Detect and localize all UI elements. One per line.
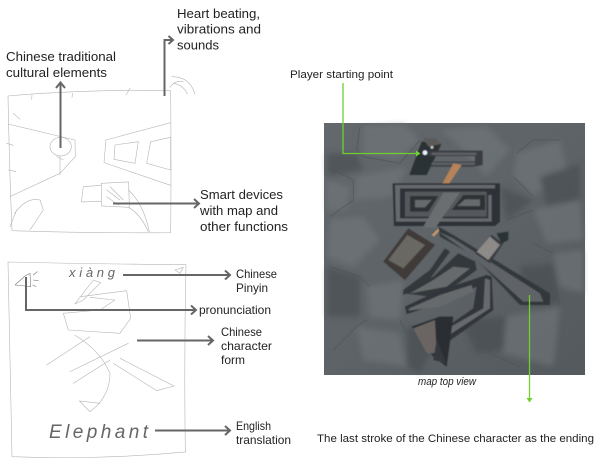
lower strokes [383, 228, 435, 280]
label: Chinese traditional cultural elements: Chinese traditional [6, 49, 116, 64]
map caption: map top view [418, 376, 477, 388]
arrow: to English translation [155, 426, 230, 435]
label: English translation: English [236, 419, 271, 433]
label: heart beating, vibrations and sounds: sounds [177, 38, 219, 52]
label: smart devices: with map and [199, 203, 278, 218]
arrow: right to smart devices [113, 199, 199, 208]
map image: stone ground with character-shaped maze [324, 123, 585, 375]
label: player starting point: Player starting point [290, 69, 393, 81]
panel: first-person view sketch [6, 6, 289, 234]
panel: map top view [290, 69, 594, 445]
arrow: to Chinese Pinyin [123, 270, 230, 280]
top stroke [409, 142, 442, 175]
arrow: up to heart beating [164, 36, 173, 96]
arrow: to Chinese character form [137, 336, 213, 345]
label: Chinese traditional cultural elements: cultural elements [6, 65, 108, 80]
sketch: card outline and character [8, 262, 186, 458]
green arrow: to player start [343, 83, 420, 156]
label: smart devices: other functions [200, 219, 289, 234]
label: Chinese Pinyin: Chinese [236, 267, 277, 281]
label: ending stroke: The last stroke of the Chinese character as the ending [317, 433, 594, 445]
label: Chinese character form: character [221, 339, 272, 353]
sketch: corridor view drawing [7, 77, 195, 233]
arrow: to pronunciation [26, 277, 196, 314]
panel: vocabulary card sketch [8, 262, 291, 458]
label: Chinese character form: Chinese [221, 325, 262, 339]
label: heart beating, vibrations and sounds: Heart beating, [177, 6, 260, 21]
box stroke [393, 183, 500, 226]
handwriting: pinyin: xiàng [68, 265, 116, 280]
label: smart devices: Smart devices [200, 187, 283, 202]
label: pronunciation: pronunciation [199, 303, 271, 317]
label: English translation: translation [236, 433, 291, 447]
label: Chinese character form: form [221, 353, 245, 367]
label: Chinese Pinyin: Pinyin [236, 281, 268, 295]
green arrow: to ending stroke [526, 295, 532, 402]
label: heart beating, vibrations and sounds: vibrations and [177, 22, 261, 36]
arrow: up to cultural elements [56, 82, 65, 148]
handwriting: English word: Elephant [49, 422, 151, 443]
